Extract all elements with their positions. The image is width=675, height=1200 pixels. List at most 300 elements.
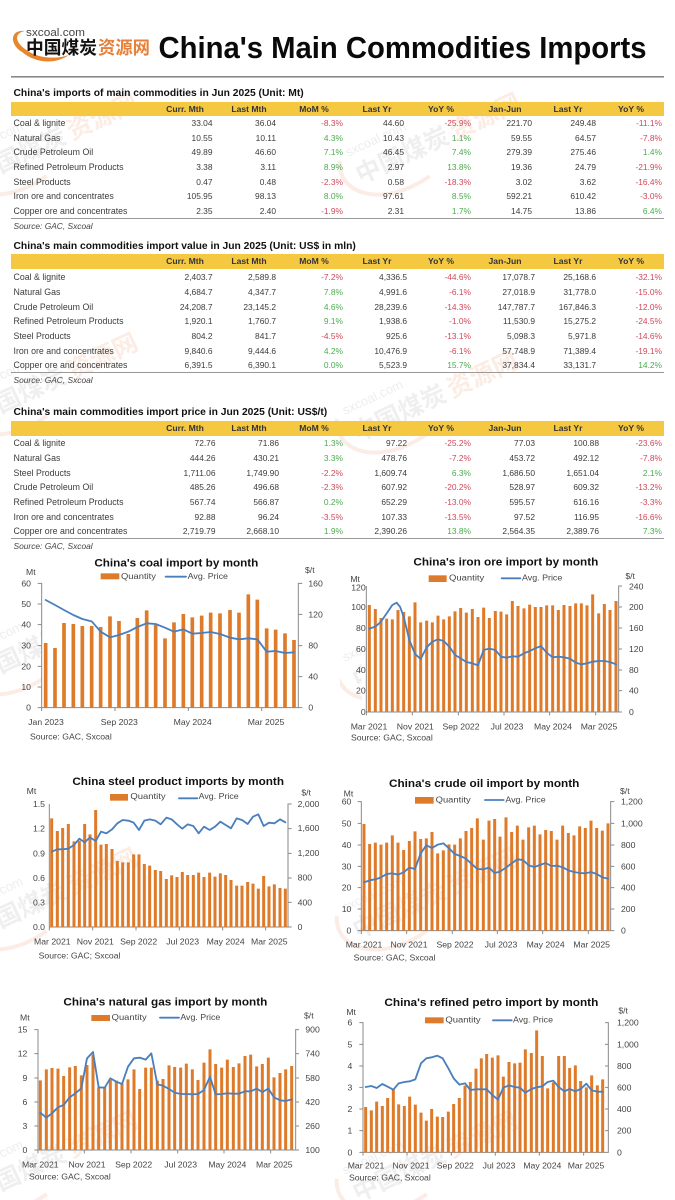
logo: sxcoal	[13, 27, 150, 61]
row: crude: 49.89	[192, 147, 212, 157]
row: coal: 2,589.8	[248, 272, 276, 282]
axis labels: natural gas: 580	[305, 1073, 320, 1083]
row: coal: 100.88	[573, 438, 599, 448]
header row: value: YoY %	[618, 256, 644, 266]
axis labels: natural gas: 420	[305, 1097, 320, 1107]
axis labels: coal: 40	[21, 620, 31, 630]
row: crude: 275.46	[570, 147, 596, 157]
row: crude: 23,145.2	[243, 302, 276, 312]
axis labels: steel: 1,200	[298, 848, 320, 858]
row: iron ore: 107.33	[381, 512, 407, 522]
row: coal: 221.70	[506, 118, 532, 128]
source note: value: Source: GAC, Sxcoal	[14, 375, 93, 385]
row: natural gas: 1.1%	[452, 133, 471, 143]
header row: price: Last Yr	[554, 423, 582, 433]
axis labels: natural gas: Nov 2021	[68, 1160, 106, 1170]
row: coal: 44.60	[383, 118, 404, 128]
row: coal: 72.76	[195, 438, 216, 448]
axis labels: coal: 120	[308, 609, 323, 619]
row: copper: 37,834.4	[502, 360, 535, 370]
axis labels: refined petro	[346, 1005, 639, 1171]
axis labels: coal: $/t	[305, 565, 315, 575]
source: coal: Source: GAC, Sxcoal	[30, 731, 112, 741]
row: steel: 0.58	[388, 177, 404, 187]
legend: steel: Quantity	[130, 791, 166, 801]
row: coal: 33.04	[192, 118, 212, 128]
axis labels: refined petro: Mar 2021	[348, 1161, 384, 1171]
row: coal: -8.3%	[321, 118, 343, 128]
row: natural gas: 10.43	[383, 133, 404, 143]
legend: coal: Avg. Price	[188, 571, 228, 581]
axis labels: refined petro: 800	[617, 1061, 632, 1071]
axis labels: crude oil	[342, 786, 643, 950]
row: refined: -24.5%	[635, 316, 662, 326]
source note: volume: Source: GAC, Sxcoal	[14, 221, 93, 231]
axis labels: steel: 1,600	[298, 823, 320, 833]
axis labels: steel: 400	[298, 897, 312, 907]
row: natural gas: 10.11	[256, 133, 276, 143]
row: crude: 609.32	[573, 482, 599, 492]
axis labels: refined petro: 600	[617, 1082, 632, 1092]
row: natural gas: 27,018.9	[502, 287, 535, 297]
row: natural gas: 453.72	[509, 453, 535, 463]
row: copper: 33,131.7	[563, 360, 596, 370]
watermark: row 3 left: 资源网	[63, 588, 142, 646]
header row: volume	[11, 102, 664, 116]
axis labels: steel: 0	[298, 922, 303, 932]
row: refined: Refined Petroleum Products	[14, 316, 124, 326]
axis labels: crude oil: Mar 2025	[573, 940, 610, 950]
row: natural gas: Natural Gas	[14, 133, 60, 143]
line: refined petro price	[366, 1056, 603, 1100]
axis labels: natural gas	[18, 1010, 320, 1170]
bars: iron ore quantity	[369, 594, 616, 712]
axis labels: crude oil: $/t	[620, 786, 630, 796]
axis labels: iron ore: Nov 2021	[397, 721, 434, 731]
row: refined: 24.79	[575, 162, 596, 172]
row: steel: 1,711.06	[184, 468, 216, 478]
row: refined: 13.8%	[447, 162, 471, 172]
axis labels: natural gas: 100	[305, 1145, 320, 1155]
row: crude	[14, 482, 662, 492]
axis labels: steel: 0.3	[33, 897, 45, 907]
watermark: row 4 right: sxcoal.com	[340, 874, 405, 915]
axis labels: iron ore: Mar 2025	[581, 721, 617, 731]
row: crude: 607.92	[381, 482, 407, 492]
row: coal	[14, 438, 662, 448]
row: refined: Refined Petroleum Products	[14, 497, 124, 507]
row: natural gas: -7.8%	[640, 453, 662, 463]
axis labels: iron ore: 40	[629, 686, 639, 696]
axis labels: iron ore: 60	[356, 644, 366, 654]
row: iron ore: 9,444.6	[248, 346, 276, 356]
row: refined: 3.38	[196, 162, 212, 172]
row: copper	[14, 526, 662, 536]
row: iron ore: 71,389.4	[563, 346, 596, 356]
row: steel: -4.5%	[321, 331, 343, 341]
axis labels: iron ore: 20	[356, 686, 366, 696]
watermark: row 3 right: 中国煤炭	[348, 627, 451, 695]
row: natural gas: 4.3%	[324, 133, 343, 143]
watermark: row 4 right: 中国煤炭	[348, 877, 451, 945]
row: crude: -12.0%	[635, 302, 662, 312]
axis labels: natural gas: 260	[305, 1121, 320, 1131]
row: iron ore: 8.5%	[452, 191, 471, 201]
row: copper	[14, 206, 662, 216]
axis labels: crude oil: 60	[342, 797, 352, 807]
row: refined: 1,938.6	[379, 316, 407, 326]
axis labels: coal: Sep 2023	[101, 717, 138, 727]
row: steel: Steel Products	[14, 331, 71, 341]
row: natural gas: 31,778.0	[563, 287, 596, 297]
header row: price: YoY %	[428, 423, 454, 433]
row: refined: 2.97	[388, 162, 404, 172]
watermark: row 1 right: sxcoal.com	[343, 119, 408, 160]
watermark: row 4 right	[328, 825, 530, 966]
row: coal: -25.9%	[444, 118, 471, 128]
row: refined: -3.3%	[640, 497, 662, 507]
axis labels: natural gas: 6	[23, 1097, 28, 1107]
row: steel: 0.48	[260, 177, 276, 187]
axis labels: crude oil: 20	[342, 883, 352, 893]
watermark: row 2 right: 中国煤炭	[348, 380, 451, 448]
axis labels: refined petro: Jul 2023	[483, 1161, 516, 1171]
row: natural gas	[14, 133, 662, 143]
line: coal price	[46, 600, 294, 653]
axis labels: steel: May 2024	[207, 936, 245, 946]
axis labels: steel: 800	[298, 873, 312, 883]
row: steel: Steel Products	[14, 468, 71, 478]
row: copper: 2,389.76	[566, 526, 599, 536]
axis labels: crude oil: Nov 2021	[390, 940, 428, 950]
row: coal: -11.1%	[636, 118, 662, 128]
row: iron ore: -6.1%	[449, 346, 471, 356]
line: crude oil price	[364, 843, 608, 882]
axis labels: crude oil: 1,000	[621, 818, 643, 828]
source: natural gas: Source: GAC, Sxcoal	[29, 1171, 111, 1181]
table: import value (US$ mln)	[11, 241, 664, 385]
watermark: row 5 right: sxcoal.com	[340, 1137, 405, 1178]
legend: coal	[101, 571, 228, 581]
row: crude: -20.2%	[444, 482, 471, 492]
axis labels: crude oil: 600	[621, 861, 636, 871]
row: crude: 485.26	[190, 482, 216, 492]
row: crude: 1.4%	[643, 147, 662, 157]
row: refined: Refined Petroleum Products	[14, 162, 124, 172]
axis labels: refined petro: 5	[348, 1039, 353, 1049]
axis labels: steel: 0.9	[33, 848, 45, 858]
row: iron ore: -3.5%	[321, 512, 343, 522]
row: crude: -14.3%	[444, 302, 471, 312]
row: steel: 1,651.04	[566, 468, 599, 478]
watermark: row 1 right: 资源网	[446, 88, 525, 146]
row: copper: Copper ore and concentrates	[14, 360, 127, 370]
bars: steel quantity	[52, 810, 285, 927]
header row: volume: YoY %	[428, 104, 454, 114]
axis labels: crude oil: 10	[342, 904, 352, 914]
axis labels: iron ore	[350, 571, 644, 731]
axes: crude oil	[358, 802, 614, 934]
row: steel: -18.3%	[444, 177, 471, 187]
main title: China's Main Commodities Imports	[158, 30, 646, 65]
header row: volume: YoY %	[618, 104, 644, 114]
header row: value: MoM %	[299, 256, 329, 266]
row: copper: 1.9%	[324, 526, 343, 536]
row: natural gas: 3.3%	[324, 453, 343, 463]
watermark: row 5 right: 资源网	[443, 1106, 522, 1164]
row: steel: 1,686.50	[502, 468, 535, 478]
axis labels: iron ore: $/t	[625, 571, 636, 581]
row: refined: -21.9%	[635, 162, 662, 172]
legend: natural gas: Quantity	[112, 1012, 147, 1022]
source: iron ore: Source: GAC, Sxcoal	[351, 732, 433, 742]
row: iron ore: 9,840.6	[185, 346, 212, 356]
legend: natural gas	[91, 1012, 221, 1022]
axis labels: steel: 0.0	[33, 922, 45, 932]
chart title: steel: China steel product imports by month	[72, 776, 284, 788]
row: steel: 6.3%	[452, 468, 471, 478]
row: copper: 7.3%	[643, 526, 662, 536]
legend: coal: Quantity	[121, 571, 157, 581]
row: copper: 2,668.10	[246, 526, 279, 536]
axis labels: crude oil: Jul 2023	[485, 940, 518, 950]
row: refined: 8.9%	[324, 162, 343, 172]
row: refined: -1.0%	[449, 316, 471, 326]
line: steel price	[52, 814, 285, 852]
row: natural gas: 64.57	[575, 133, 596, 143]
row: refined: 567.74	[190, 497, 216, 507]
axis labels: crude oil: Mar 2021	[346, 940, 382, 950]
row: iron ore: 98.13	[255, 191, 276, 201]
row: refined	[14, 497, 662, 507]
table heading: value: China's main commodities import value in Jun 2025 (Unit: US$ in mln)	[14, 241, 356, 252]
row: iron ore: 97.61	[383, 191, 404, 201]
axis labels: natural gas: 3	[23, 1121, 28, 1131]
axis labels: natural gas: 900	[305, 1025, 320, 1035]
row: crude: 24,208.7	[180, 302, 212, 312]
axis labels: natural gas: Mar 2021	[22, 1160, 59, 1170]
watermark: row 2 right: 资源网	[443, 346, 522, 404]
row: iron ore: 610.42	[570, 191, 596, 201]
row: copper: 0.0%	[324, 360, 343, 370]
row: steel: 5,971.8	[568, 331, 596, 341]
axis labels: steel: Nov 2021	[77, 936, 114, 946]
axis labels: steel: 1.5	[33, 799, 45, 809]
row: coal: 77.03	[514, 438, 535, 448]
axis labels: natural gas: 12	[18, 1049, 28, 1059]
row: copper: -1.9%	[321, 206, 343, 216]
logo: sxcoal: 资源网	[98, 38, 150, 58]
table: import price (US$/t)	[11, 407, 664, 551]
legend: refined petro: Quantity	[445, 1015, 481, 1025]
row: coal: -23.6%	[635, 438, 662, 448]
row: coal: 249.48	[570, 118, 596, 128]
row: coal: Coal & lignite	[14, 272, 65, 282]
row: crude: 28,239.6	[374, 302, 407, 312]
axis labels: steel: Mar 2025	[251, 936, 288, 946]
row: crude: 7.4%	[452, 147, 471, 157]
row: crude: Crude Petroleum Oil	[14, 482, 93, 492]
table heading: price: China's main commodities import price in Jun 2025 (Unit: US$/t)	[14, 407, 327, 418]
row: crude	[14, 147, 662, 157]
axis labels: iron ore: 160	[629, 623, 644, 633]
axis labels: iron ore: 120	[629, 644, 644, 654]
row: refined	[14, 162, 662, 172]
row: crude: Crude Petroleum Oil	[14, 147, 93, 157]
row: refined: 616.16	[573, 497, 599, 507]
watermark: row 1 right	[331, 70, 533, 211]
row: crude: 167,846.3	[559, 302, 596, 312]
chart: steel product imports	[27, 776, 320, 960]
axis labels: coal: 0	[26, 703, 31, 713]
watermark: row 1 right: 中国煤炭	[351, 122, 454, 190]
row: copper: 2.40	[260, 206, 276, 216]
row: copper: 6,390.1	[248, 360, 276, 370]
row: iron ore: 4.2%	[324, 346, 343, 356]
row: steel	[14, 468, 662, 478]
axis labels: coal: 40	[308, 672, 318, 682]
row: steel: 925.6	[386, 331, 407, 341]
watermark: row 4 right: 资源网	[443, 843, 522, 901]
axis labels: steel: 1.2	[33, 824, 45, 834]
row: refined	[14, 316, 662, 326]
row: refined: 566.87	[253, 497, 279, 507]
axis labels: crude oil: Sep 2022	[436, 940, 474, 950]
watermark: row 4 left	[0, 825, 150, 966]
row: steel: Steel Products	[14, 177, 71, 187]
row: crude: Crude Petroleum Oil	[14, 302, 93, 312]
axis labels: coal: 60	[21, 578, 31, 588]
row: natural gas: 7.8%	[324, 287, 343, 297]
row: iron ore	[14, 191, 662, 201]
axis labels: steel: Sep 2022	[120, 936, 157, 946]
line: natural gas price	[40, 1052, 292, 1118]
chart: refined petro import	[346, 997, 639, 1182]
row: coal: 4,336.5	[379, 272, 407, 282]
line: iron ore price	[369, 603, 616, 665]
row: steel: 841.7	[255, 331, 276, 341]
row: iron ore: 96.24	[258, 512, 279, 522]
watermark: row 2 right	[328, 328, 530, 469]
chart title: coal: China's coal import by month	[94, 557, 259, 569]
axis labels: iron ore: May 2024	[534, 721, 572, 731]
row: crude: 46.45	[383, 147, 404, 157]
row: natural gas: 4,991.6	[379, 287, 407, 297]
axes: natural gas	[34, 1030, 299, 1153]
axis labels: natural gas: Mar 2025	[256, 1160, 293, 1170]
watermark: row 3 right: 资源网	[443, 593, 522, 651]
row: steel: -16.4%	[635, 177, 662, 187]
row: iron ore: Iron ore and concentrates	[14, 512, 114, 522]
axis labels: iron ore: 80	[356, 623, 366, 633]
axis labels: crude oil: May 2024	[527, 940, 565, 950]
axis labels: refined petro: 1	[348, 1126, 353, 1136]
axis labels: refined petro: 400	[617, 1104, 632, 1114]
chart: iron ore import	[350, 556, 644, 742]
row: crude: 528.97	[509, 482, 535, 492]
row: refined: -13.0%	[444, 497, 471, 507]
row: coal: 25,168.6	[563, 272, 596, 282]
source: crude oil: Source: GAC, Sxcoal	[354, 953, 436, 963]
axis labels: steel: Mt	[27, 786, 37, 796]
axis labels: natural gas: 740	[305, 1049, 320, 1059]
row: coal: Coal & lignite	[14, 118, 65, 128]
axis labels: iron ore: 200	[629, 602, 644, 612]
row: steel: -2.2%	[321, 468, 343, 478]
row: iron ore: 105.95	[187, 191, 212, 201]
row: copper: 1.7%	[452, 206, 471, 216]
row: copper: 5,523.9	[379, 360, 407, 370]
row: coal: 1.3%	[324, 438, 343, 448]
axis labels: refined petro: 6	[348, 1018, 353, 1028]
chart title: refined petro: China's refined petro import by month	[384, 997, 599, 1009]
row: copper: 2,719.79	[183, 526, 216, 536]
row: copper: 6,391.5	[185, 360, 212, 370]
axis labels: coal: May 2024	[174, 717, 212, 727]
row: crude: 279.39	[506, 147, 532, 157]
row: iron ore: 592.21	[506, 191, 532, 201]
row: copper: 2.35	[196, 206, 212, 216]
axis labels: iron ore: 80	[629, 665, 639, 675]
source note: price: Source: GAC, Sxcoal	[14, 541, 93, 551]
header row: value: YoY %	[428, 256, 454, 266]
row: coal: Coal & lignite	[14, 438, 65, 448]
row: coal: 71.86	[258, 438, 279, 448]
watermark: row 5 right	[328, 1088, 530, 1200]
axes: coal	[38, 583, 302, 711]
chart: coal import	[21, 557, 323, 741]
row: refined: 9.1%	[324, 316, 343, 326]
axis labels: steel: $/t	[301, 787, 312, 797]
axis labels: iron ore: 0	[361, 707, 366, 717]
axis labels: iron ore: 120	[351, 582, 366, 592]
row: copper: 2,390.26	[374, 526, 407, 536]
row: steel: 5,098.3	[507, 331, 535, 341]
axis labels: coal: 30	[21, 641, 31, 651]
legend: crude oil: Avg. Price	[505, 795, 546, 805]
axis labels: iron ore: Sep 2022	[442, 721, 480, 731]
axis labels: iron ore: Mar 2021	[351, 721, 387, 731]
axis labels: refined petro: 4	[348, 1061, 353, 1071]
axis labels: crude oil: 1,200	[621, 797, 643, 807]
source: refined petro: Source: GAC, Sxcoal	[349, 1172, 431, 1182]
row: natural gas: 430.21	[253, 453, 279, 463]
axis labels: crude oil: 0	[347, 926, 352, 936]
axis labels: refined petro: $/t	[618, 1005, 629, 1015]
row: crude: 7.1%	[324, 147, 343, 157]
row: natural gas: 4,347.7	[248, 287, 276, 297]
header row: volume: Last Yr	[554, 104, 582, 114]
row: copper: 2.31	[388, 206, 404, 216]
row: steel: 3.02	[516, 177, 532, 187]
row: coal	[14, 272, 662, 282]
axis labels: refined petro: Mt	[346, 1007, 357, 1017]
watermark: row 5 left	[0, 1088, 150, 1200]
row: steel: 0.47	[196, 177, 212, 187]
row: iron ore: -16.6%	[635, 512, 662, 522]
header row: price: Last Mth	[231, 423, 267, 433]
row: steel	[14, 331, 662, 341]
legend: crude oil: Quantity	[436, 795, 471, 805]
watermark: row 3 right	[328, 575, 530, 716]
axis labels: refined petro: 0	[348, 1147, 353, 1157]
row: crude: 46.60	[255, 147, 276, 157]
axes: refined petro	[359, 1023, 608, 1156]
legend: iron ore: Avg. Price	[522, 573, 563, 583]
row: iron ore: -19.1%	[635, 346, 662, 356]
row: refined: 595.57	[509, 497, 535, 507]
legend: refined petro: Avg. Price	[513, 1015, 553, 1025]
